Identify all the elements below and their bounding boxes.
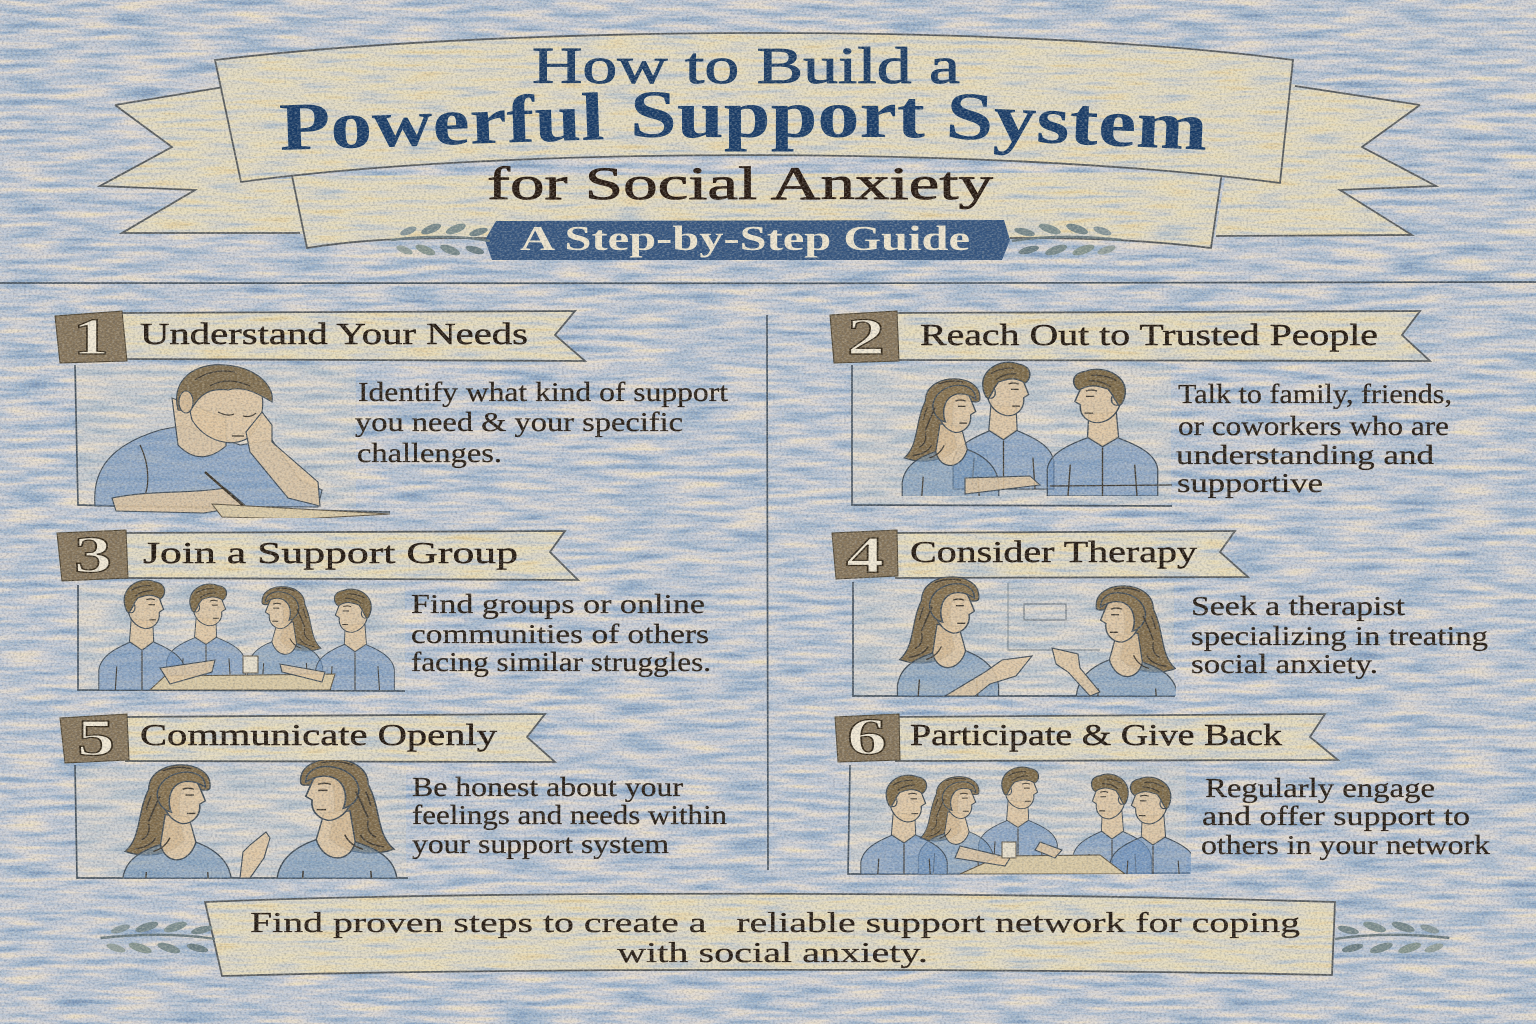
step 4 header ribbon [832,527,1248,584]
step 5: communicate openly [60,713,727,879]
step 4 header ribbon: Consider Therapy [910,534,1198,569]
step 2 text: Talk to family, friends, [1178,379,1452,409]
icon: left footer sprig [101,919,215,956]
banner tails right [1215,84,1436,236]
step 3 text: communities of others [411,619,709,649]
step 1 text: Identify what kind of support [358,377,729,407]
step 4 text [1191,591,1488,679]
title line 2: Support [630,76,925,152]
icon: left laurel sprig [391,221,490,258]
icon: right laurel sprig [1012,221,1121,258]
step 2: reach out to trusted people [830,309,1452,506]
step 3 frame [78,585,405,691]
step 2 header ribbon: Reach Out to Trusted People [920,317,1378,352]
step 2 header ribbon [830,309,1430,366]
subtitle band [485,219,1010,260]
step 2 text: supportive [1177,468,1323,498]
title line 2: System [944,77,1209,165]
subtitle band: A Step-by-Step Guide [520,219,970,258]
step 4 text: social anxiety. [1191,649,1378,679]
step 5 header ribbon [60,710,555,767]
step 6: participate and give back [835,709,1491,888]
layout dividers [0,282,1536,870]
step 4 text: Seek a therapist [1191,591,1406,621]
step 6 header ribbon: 6 [847,709,887,766]
step 6 text: and offer support to [1202,801,1470,831]
step 2 text: or coworkers who are [1178,411,1449,441]
footer ribbon [205,894,1335,976]
illustration: group of five at table [860,766,1191,874]
step 3 header ribbon [57,527,578,584]
title banner [100,33,1436,260]
footer text: Find proven steps to create a reliable support network for coping [250,907,1300,939]
step 5 frame [75,765,408,878]
step 4 header ribbon: 4 [846,527,884,584]
title line 1: How to Build a [532,38,960,95]
step 3 text [411,589,711,677]
step 4: consider therapy [832,530,1488,697]
step 5 text [412,772,728,859]
icon: right footer sprig [1335,919,1449,956]
step 5 header ribbon: 5 [77,710,115,767]
step 1 text [355,377,729,468]
step 4 frame [853,582,1175,696]
step 6 header ribbon [835,709,1338,766]
step 4 text: specializing in treating [1191,621,1488,651]
step 2 header ribbon: 2 [847,309,885,366]
step 1 frame [75,365,390,512]
lower ribbon [292,172,1222,248]
main ribbon [215,33,1293,183]
step 6 text: Regularly engage [1205,773,1435,803]
step 3 text: facing similar struggles. [411,647,711,677]
footer text [250,907,1300,969]
illustration: two women talking [122,760,398,878]
step 6 frame [848,765,1190,874]
illustration: support group at table [99,580,394,695]
footer text: with social anxiety. [617,937,928,969]
step 5 text: your support system [412,829,669,859]
illustration: man writing, head in hand [95,365,390,519]
step 2 text [1176,379,1452,498]
title line 2: Powerful [278,78,605,165]
step 3 text: Find groups or online [411,589,705,619]
illustration: three people talking [902,362,1172,506]
step 5 header ribbon: Communicate Openly [140,717,498,752]
step 3 header ribbon: 3 [74,527,112,584]
step 1: understand your needs [55,309,729,519]
step 1 text: you need & your specific [355,407,683,437]
step 1 header ribbon [55,309,585,366]
banner tails left [100,84,308,234]
illustration: therapist and client [896,576,1176,696]
title line 3: for Social Anxiety [487,158,994,210]
step 2 frame [852,365,1172,506]
step 1 text: challenges. [357,438,502,468]
step 3 header ribbon: Join a Support Group [143,535,518,570]
title line 2 [278,76,1209,165]
step 3: join a support group [57,527,711,695]
step 1 header ribbon: Understand Your Needs [140,316,528,351]
footer banner [101,894,1449,976]
step 6 header ribbon: Participate & Give Back [910,717,1283,752]
step 6 text: others in your network [1201,830,1491,860]
step 6 text [1201,773,1491,860]
step 5 text: feelings and needs within [412,800,728,830]
step 1 header ribbon: 1 [73,309,109,366]
step 5 text: Be honest about your [412,772,683,802]
step 2 text: understanding and [1176,440,1435,470]
